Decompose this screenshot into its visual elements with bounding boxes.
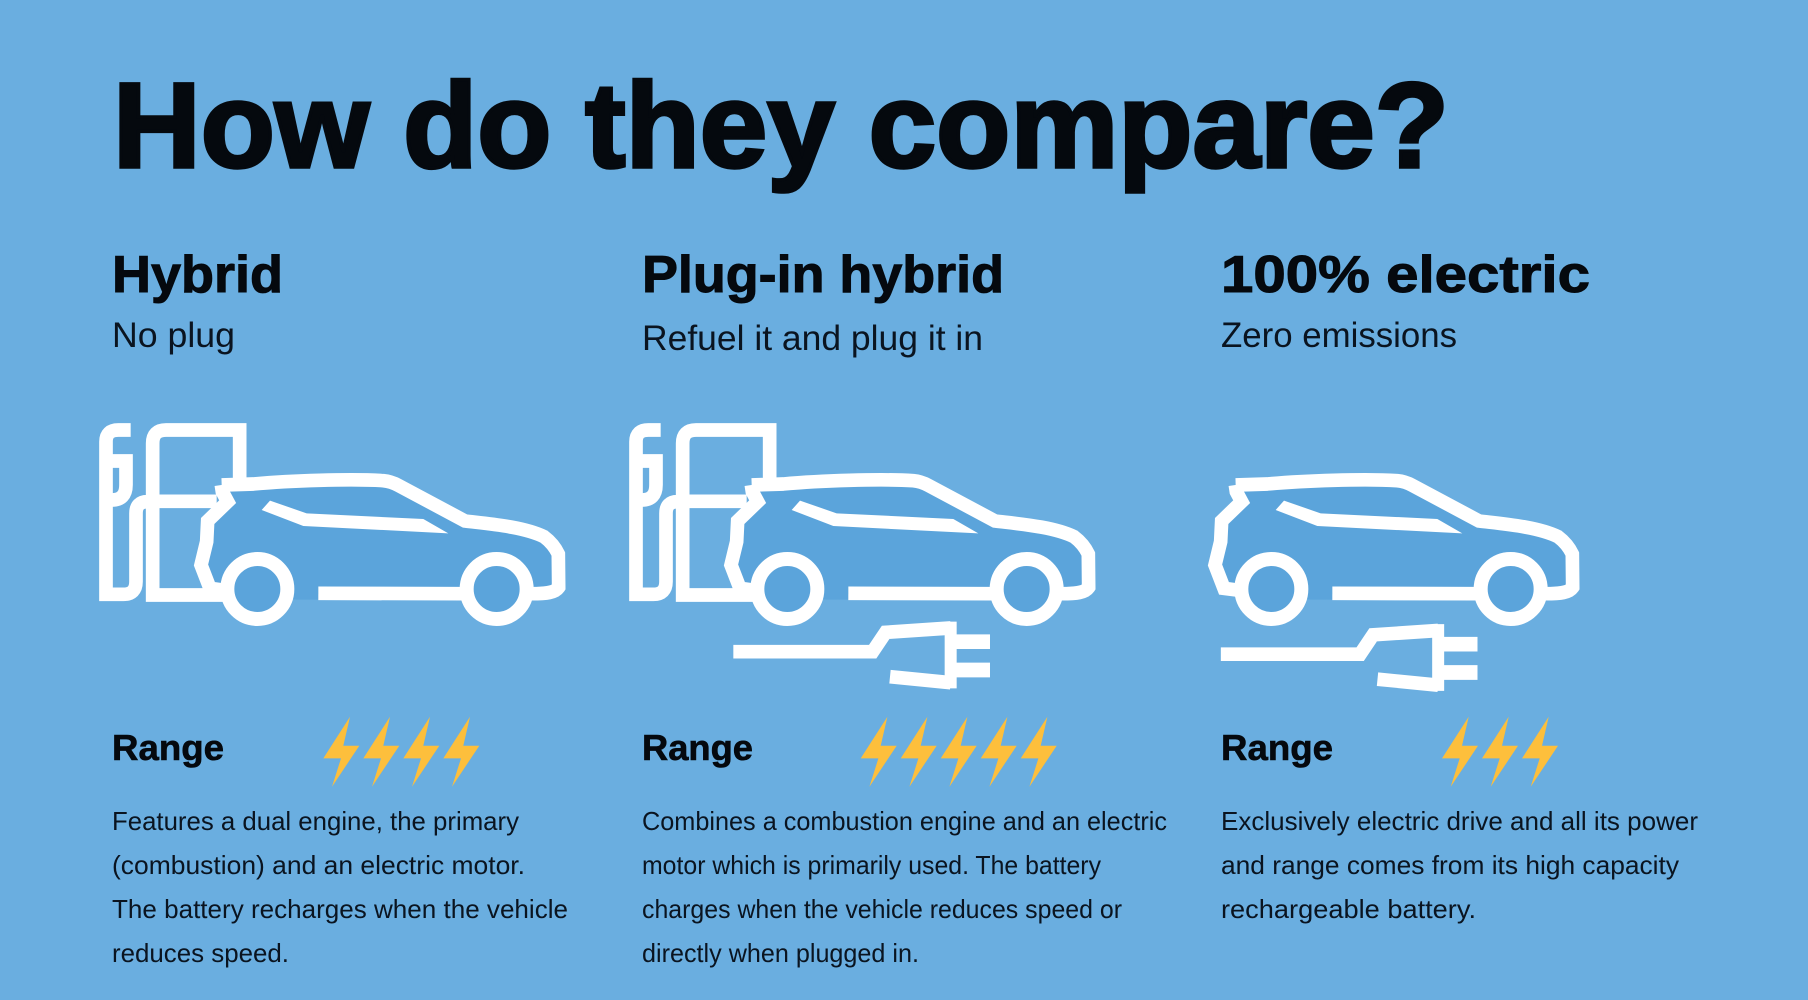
description: plug-in hybrid: directly when plugged in. bbox=[642, 938, 919, 968]
title: How do they compare? bbox=[113, 57, 1449, 193]
subheading: refuel and plug: Refuel it and plug it in bbox=[642, 319, 983, 358]
icon: plug bbox=[733, 622, 990, 688]
icon: fuel pump bbox=[106, 430, 240, 595]
range rating: 4 bolts bbox=[323, 717, 479, 787]
icon: car bbox=[201, 480, 559, 619]
icon: fuel pump bbox=[636, 430, 770, 595]
description: hybrid: (combustion) and an electric motor. bbox=[112, 850, 525, 880]
description: hybrid: reduces speed. bbox=[112, 938, 289, 968]
description: plug-in hybrid: Combines a combustion engine and an electric bbox=[642, 806, 1167, 836]
range label: Range bbox=[1221, 727, 1333, 768]
range label: Range bbox=[112, 727, 224, 768]
icon: plug bbox=[1221, 624, 1477, 691]
description: hybrid bbox=[112, 806, 568, 968]
description: 100% electric: and range comes from its high capacity bbox=[1221, 850, 1679, 880]
description: 100% electric bbox=[1221, 806, 1698, 924]
heading: 100% electric: 100% electric bbox=[1221, 246, 1590, 304]
description: hybrid: Features a dual engine, the primary bbox=[112, 806, 519, 836]
icon: car bbox=[1215, 480, 1573, 619]
subheading: zero emissions: Zero emissions bbox=[1221, 316, 1457, 355]
description: plug-in hybrid: motor which is primarily used. The battery bbox=[642, 850, 1101, 880]
description: 100% electric: rechargeable battery. bbox=[1221, 894, 1476, 924]
range rating: 3 bolts bbox=[1442, 717, 1558, 787]
description: plug-in hybrid bbox=[642, 806, 1167, 968]
panel: hybrid bbox=[106, 246, 568, 968]
panel: plug-in hybrid bbox=[636, 246, 1167, 968]
heading: hybrid: Hybrid bbox=[112, 246, 283, 304]
description: 100% electric: Exclusively electric drive and all its power bbox=[1221, 806, 1698, 836]
range label: Range bbox=[642, 727, 753, 768]
subheading: no plug: No plug bbox=[112, 316, 235, 355]
icon: car bbox=[731, 480, 1089, 619]
description: plug-in hybrid: charges when the vehicle reduces speed or bbox=[642, 894, 1122, 924]
range rating: 5 bolts bbox=[861, 717, 1057, 787]
heading: plug-in hybrid: Plug-in hybrid bbox=[642, 246, 1004, 304]
description: hybrid: The battery recharges when the vehicle bbox=[112, 894, 568, 924]
panel: 100% electric bbox=[1215, 246, 1698, 924]
